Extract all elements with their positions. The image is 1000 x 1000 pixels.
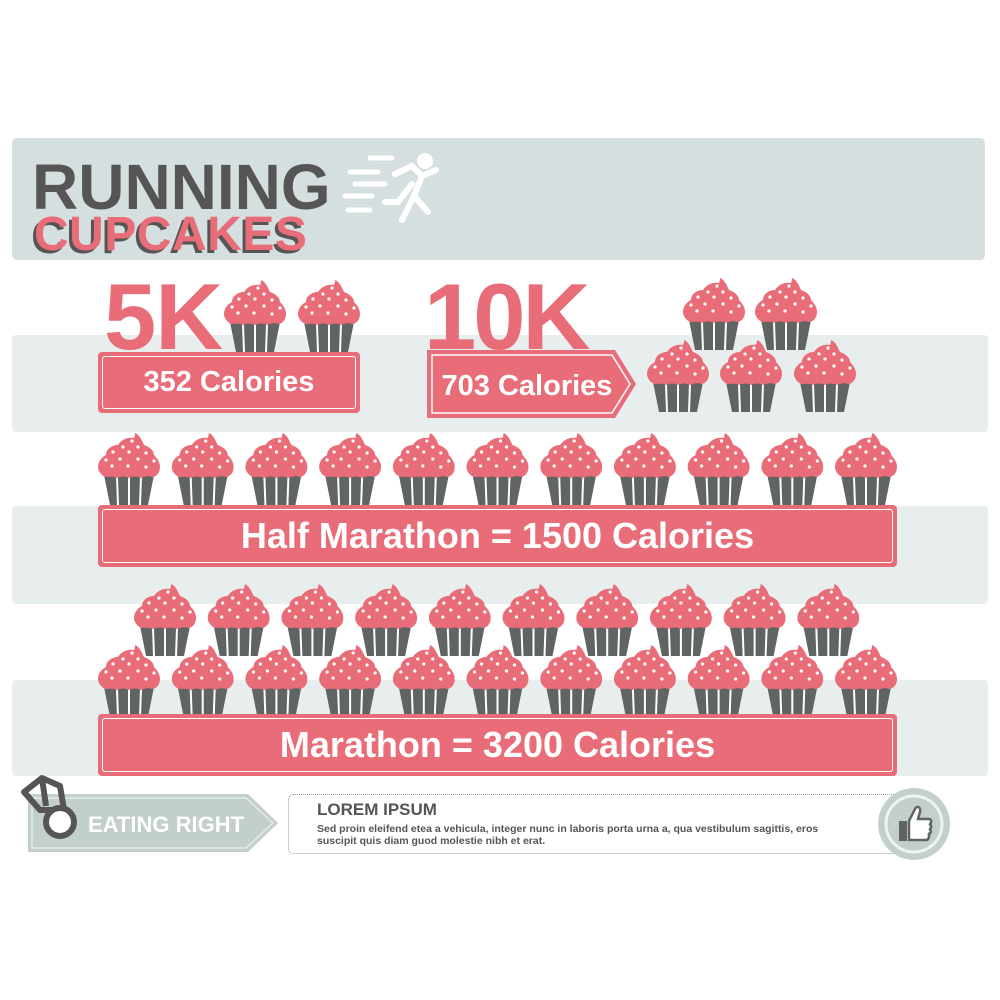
label: half marathon: Half Marathon = 1500 Calories [241, 515, 754, 556]
eating right tag [21, 775, 278, 852]
label: 352 Calories [98, 352, 360, 413]
header panel [12, 138, 985, 260]
title: CUPCAKES [34, 208, 307, 261]
heading: 10K: 10K [424, 264, 587, 369]
label: 352 Calories: 352 Calories [144, 366, 314, 398]
heading: 5K: 5K [104, 264, 222, 369]
cupcakes: 10K [647, 278, 856, 412]
cupcakes: marathon [98, 584, 897, 714]
label: 703 Calories arrow: 703 Calories [442, 370, 612, 402]
label: 703 Calories arrow [427, 350, 636, 418]
label: half marathon [98, 505, 897, 567]
label: marathon: Marathon = 3200 Calories [280, 724, 715, 765]
eating right tag: EATING RIGHT [88, 812, 245, 837]
band 1 [12, 335, 988, 432]
cupcakes: half marathon [98, 433, 897, 505]
icon: runner [342, 153, 439, 223]
title [31, 151, 331, 264]
icon: medal [24, 778, 74, 836]
text box: lorem ipsum [288, 794, 920, 854]
title: CUPCAKES [31, 211, 304, 264]
title: RUNNING [32, 151, 331, 223]
band 2 [12, 506, 988, 604]
icon: thumbs up [878, 788, 950, 860]
label: marathon [98, 714, 897, 776]
band 3 [12, 680, 988, 776]
cupcakes: 5K [224, 280, 360, 352]
text box: lorem ipsum: LOREM IPSUM [317, 800, 437, 819]
text box: lorem ipsum: Sed proin eleifend etea a vehicula, integer nunc in laboris porta urna a, qua vestibulum sagittis, eros suscipit quis diam guod molestie nibh et erat. [317, 823, 818, 847]
